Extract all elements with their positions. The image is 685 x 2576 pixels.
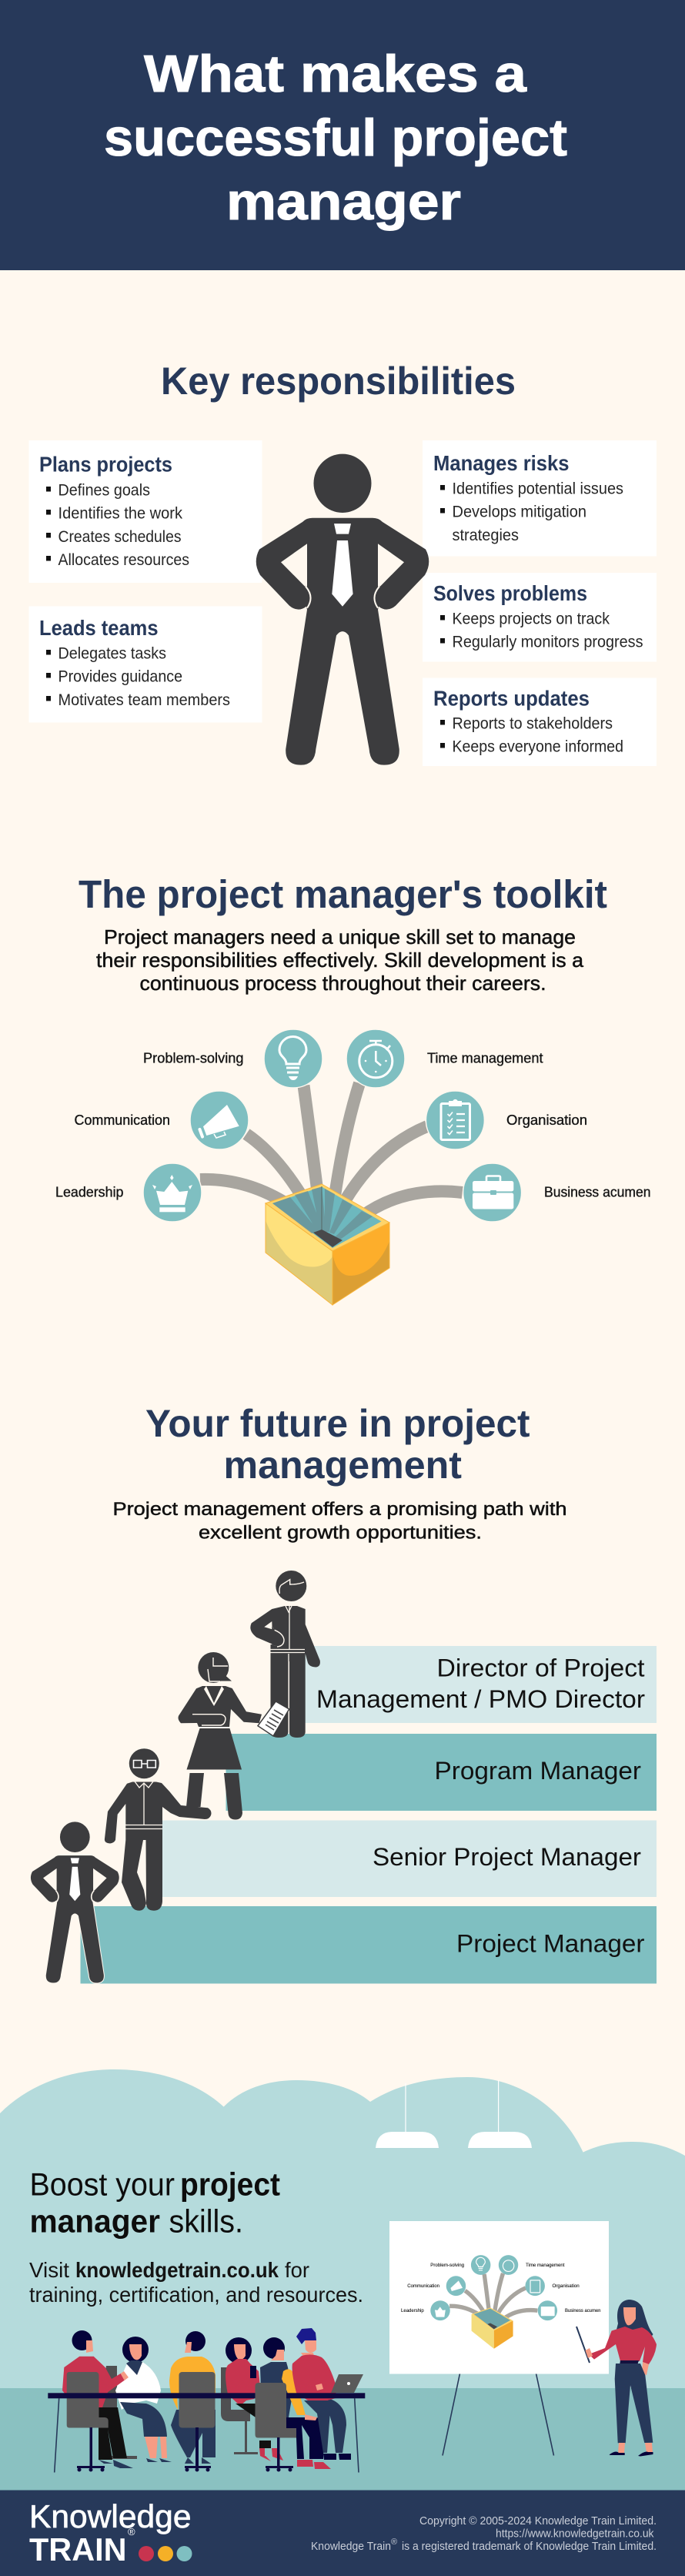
panel: solves problems: Solves problems [433, 581, 587, 605]
mini toolkit diagram: Time management [526, 2263, 565, 2268]
panel: leads teams: Motivates team members [58, 691, 230, 709]
logo: Knowledge Train [29, 2498, 192, 2568]
panel: plans projects: Identifies the work [58, 505, 182, 522]
career intro paragraph [112, 1499, 566, 1543]
panel: leads teams: Provides guidance [58, 668, 182, 685]
person: man in yellow sweater, back view [169, 2331, 216, 2471]
call to action text: skills. [169, 2203, 243, 2239]
panel: leads teams: Delegates tasks [58, 645, 166, 662]
person: woman in red sweater with phone [226, 2337, 283, 2461]
panel: manages risks [423, 440, 657, 556]
heading: your future in project management: management [223, 1444, 462, 1487]
panel: reports updates: Reports to stakeholders [453, 714, 613, 733]
icon: clipboard checklist [426, 1091, 484, 1149]
panel: solves problems [423, 573, 657, 662]
skill labels: Business acumen [544, 1184, 651, 1199]
logo: Knowledge Train: ® [128, 2526, 135, 2538]
toolkit intro paragraph: continuous process throughout their careers. [140, 972, 546, 995]
header banner with title: successful project [104, 109, 567, 167]
call to action text [29, 2166, 363, 2307]
panel: plans projects: Defines goals [58, 482, 150, 499]
toolkit intro paragraph [96, 925, 584, 995]
call to action text: knowledgetrain.co.uk [75, 2258, 279, 2282]
footer band [0, 2490, 685, 2576]
copyright notice: ® [391, 2538, 397, 2547]
panel: reports updates: Reports updates [433, 687, 590, 710]
skill labels: Problem-solving [143, 1050, 243, 1066]
mini toolkit diagram [401, 2255, 600, 2349]
mini toolkit diagram: Communication [407, 2284, 439, 2289]
panel: plans projects [29, 440, 262, 583]
illustration: team meeting around a table [48, 2328, 365, 2473]
header banner with title: What makes a [144, 45, 527, 103]
icon: central businessman figure [256, 454, 429, 765]
panel: solves problems: Regularly monitors progress [453, 633, 643, 651]
copyright notice: Knowledge Train [311, 2540, 391, 2553]
figure: top man (director) [250, 1571, 320, 1738]
illustration: presenter with pointer [576, 2300, 657, 2456]
background: floor [0, 2388, 685, 2491]
panel: manages risks: Identifies potential issues [453, 480, 623, 497]
mini toolkit diagram: Organisation [553, 2284, 580, 2289]
panel: manages risks: Develops mitigation [453, 503, 586, 520]
skill labels: Communication [74, 1112, 170, 1128]
icon: lightbulb [264, 1029, 322, 1088]
mini toolkit diagram: Business acumen [565, 2309, 600, 2313]
call to action text: Visit [29, 2258, 69, 2282]
chair back [179, 2372, 216, 2471]
copyright notice [311, 2514, 657, 2553]
clipboard held by woman [258, 1701, 289, 1736]
step: project manager [80, 1906, 657, 1983]
toolkit diagram: skills flowing from box [55, 1029, 651, 1305]
panel: plans projects: Allocates resources [58, 551, 189, 569]
career ladder steps [80, 1646, 657, 1983]
icon: crown [143, 1163, 202, 1222]
career intro paragraph: excellent growth opportunities. [199, 1523, 482, 1543]
panel: reports updates [423, 677, 657, 766]
step: program manager [226, 1734, 657, 1811]
copyright notice: Copyright © 2005-2024 Knowledge Train Limited. [419, 2514, 657, 2527]
person: woman in white shirt [115, 2337, 172, 2462]
icon: briefcase [463, 1163, 522, 1222]
step: senior project manager [162, 1820, 657, 1897]
step: director: Director of Project [437, 1654, 645, 1681]
icon: laptop [331, 2374, 363, 2393]
heading: your future in project management [145, 1402, 530, 1487]
person: man in red sweater, back view [62, 2330, 133, 2471]
heading: your future in project management: Your future in project [145, 1402, 530, 1445]
skill labels: Time management [427, 1050, 543, 1066]
call to action text: project [180, 2166, 280, 2202]
call to action text: Boost your [29, 2166, 175, 2202]
figure: man with glasses (senior PM) [105, 1748, 211, 1911]
panel: plans projects: Creates schedules [58, 528, 182, 546]
heading: key responsibilities: Key responsibilities [161, 360, 516, 403]
table top and legs [48, 2393, 365, 2473]
copyright notice: https://www.knowledgetrain.co.uk [496, 2527, 654, 2541]
icon: stopwatch [346, 1029, 405, 1088]
whiteboard on easel with mini toolkit [389, 2221, 609, 2456]
logo: Knowledge Train: Knowledge [29, 2498, 191, 2534]
logo: Knowledge Train: TRAIN [29, 2531, 126, 2568]
career intro paragraph: Project management offers a promising path with [112, 1499, 566, 1520]
step: director: Management / PMO Director [316, 1685, 645, 1713]
figure: bottom man (project manager) [30, 1822, 119, 1983]
panel: leads teams: Leads teams [39, 616, 159, 640]
icon: ceiling lamps [376, 2080, 532, 2148]
person: man in navy vest and yellow sleeves [260, 2337, 331, 2469]
toolkit intro paragraph: Project managers need a unique skill set to manage [104, 925, 576, 948]
step: senior project manager: Senior Project Manager [373, 1843, 641, 1871]
icon: megaphone [190, 1091, 249, 1149]
step: director [305, 1646, 657, 1723]
chair back [67, 2372, 109, 2471]
mini toolkit diagram: Leadership [401, 2309, 424, 2313]
call to action text: training, certification, and resources. [29, 2283, 363, 2307]
panel: manages risks: strategies [453, 527, 519, 544]
heading: the project manager's toolkit: The project manager's toolkit [79, 872, 607, 916]
call to action text: for [285, 2258, 309, 2282]
icon: open yellow box [266, 1184, 389, 1305]
background: training room cloud wall [0, 2069, 685, 2490]
step: project manager: Project Manager [456, 1929, 645, 1957]
panel: plans projects: Plans projects [39, 453, 172, 476]
header banner with title: manager [226, 172, 461, 231]
figure: woman with clipboard (program manager) [179, 1652, 289, 1820]
chair front right [256, 2383, 296, 2471]
skill labels: Organisation [506, 1112, 587, 1128]
back chairs [96, 2366, 258, 2459]
header banner with title [0, 0, 685, 270]
person: smiling man in red sweater [292, 2328, 351, 2460]
panel: solves problems: Keeps projects on track [453, 610, 610, 628]
skill labels [55, 1050, 651, 1199]
call to action text: manager [29, 2203, 160, 2239]
copyright notice: is a registered trademark of Knowledge Train Limited. [402, 2540, 657, 2553]
mini toolkit diagram: Problem-solving [430, 2263, 464, 2268]
panel: manages risks: Manages risks [433, 451, 570, 475]
step: program manager: Program Manager [434, 1757, 641, 1785]
toolkit intro paragraph: their responsibilities effectively. Skill development is a [96, 948, 584, 972]
skill labels: Leadership [55, 1184, 123, 1199]
panel: leads teams [29, 607, 262, 722]
panel: reports updates: Keeps everyone informed [453, 738, 623, 756]
skill beams [200, 1083, 463, 1216]
